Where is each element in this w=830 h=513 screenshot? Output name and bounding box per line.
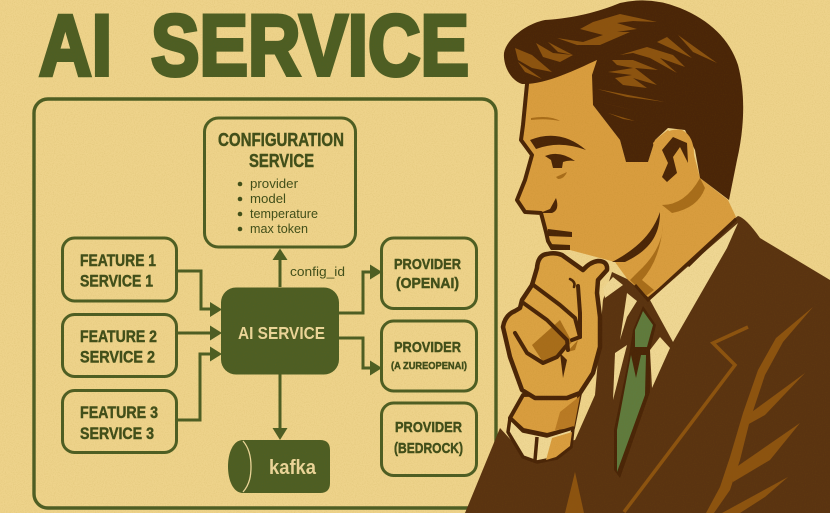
arrow: ai service to kafka [272,374,288,440]
lapel highlights [565,307,813,513]
eye and eyebrow [530,117,586,179]
panel: provider azure openai: PROVIDER [394,340,461,356]
list: configuration options: provider [250,177,298,191]
panel: feature 1 service 1 [62,238,176,301]
panel: provider openai: (OPENAI) [396,276,459,292]
panel: architecture frame [34,99,496,508]
list: configuration options: max token [250,222,308,236]
panel: provider bedrock: (BEDROCK) [394,441,463,457]
panel: ai service node: AI SERVICE [238,323,325,343]
hair highlights [515,14,717,121]
panel: feature 1 service 1: FEATURE 1 [80,252,156,270]
arrow: ai service to provider openai [339,264,382,313]
label: config_id: config_id [290,264,345,279]
list: configuration options: model [250,192,286,206]
shirt cuff [508,418,573,462]
panel: provider azure openai: (A ZUREOPENAI) [391,360,467,372]
list: configuration options [238,177,318,236]
panel: feature 3 service 3: FEATURE 3 [80,404,158,422]
heading: configuration service: SERVICE [249,151,314,171]
panel: provider openai [382,238,476,308]
title: SERVICE [151,0,469,94]
arrow: feature 1 to ai service [177,271,222,317]
panel: feature 3 service 3 [62,390,176,452]
shirt collar [603,223,738,400]
fist [503,253,607,398]
panel: feature 2 service 2 [62,314,176,376]
finger crease [560,353,567,378]
panel: provider bedrock [382,403,476,476]
icon: kafka cylinder [228,440,330,493]
panel: feature 2 service 2: SERVICE 2 [80,348,155,366]
title: AI [39,0,112,94]
panel: configuration service [204,118,356,247]
panel: provider openai: PROVIDER [394,257,461,273]
panel: provider bedrock: PROVIDER [395,420,462,436]
panel: ai service node [221,288,339,374]
face and neck [517,60,736,297]
wrist [510,393,580,435]
collar line [688,219,736,266]
panel: feature 3 service 3: SERVICE 3 [80,425,154,443]
heading: configuration service: CONFIGURATION [218,130,344,150]
arrow: feature 2 to ai service [177,326,222,340]
arrow: feature 3 to ai service [177,346,222,420]
arrow: ai service to provider azure [339,338,382,376]
heading: configuration service [218,130,344,171]
panel: feature 1 service 1: SERVICE 1 [80,272,153,290]
hand [503,253,607,462]
finger lines [515,279,580,363]
face outline [517,84,552,248]
suit [465,216,830,513]
title [39,0,469,94]
list: configuration options: temperature [250,207,318,221]
knuckle shading [532,320,572,362]
panel: feature 2 service 2: FEATURE 2 [80,328,157,346]
icon: kafka cylinder: kafka [269,457,317,479]
ear [653,130,694,198]
necktie [614,306,656,478]
panel: provider azure openai [382,321,476,391]
neck shadow [662,178,705,213]
illustration: thinking man [465,0,830,513]
arrow: ai service to configuration [272,248,288,287]
hair [504,0,743,200]
